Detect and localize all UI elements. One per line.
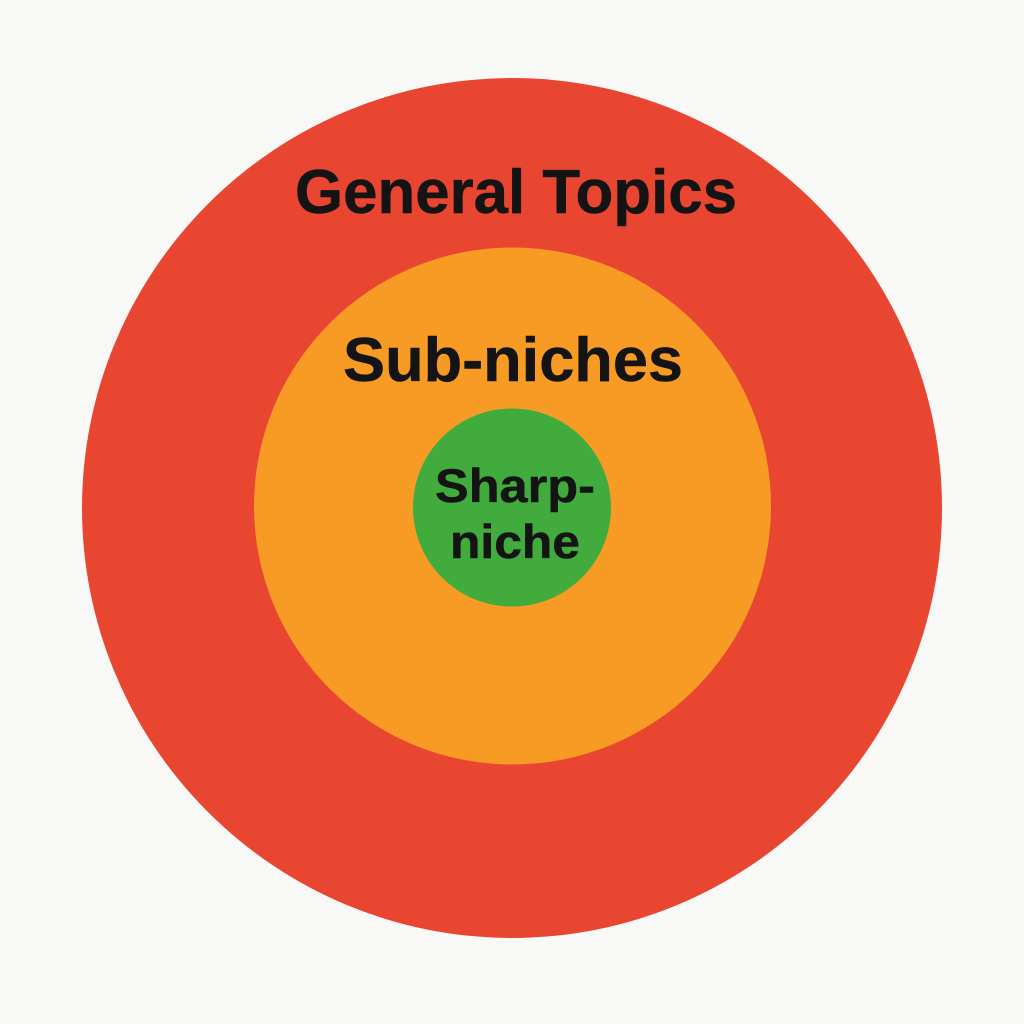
outer circle: General Topics [82, 78, 942, 938]
label: General Topics: General Topics [295, 158, 737, 227]
inner circle: Sharp-niche [413, 408, 611, 606]
label: Sharp-niche: niche [450, 515, 580, 568]
label: Sharp-niche: Sharp- [435, 459, 595, 512]
label: Sub-niches: Sub-niches [343, 326, 683, 395]
label: Sharp-niche [435, 459, 595, 568]
middle circle: Sub-niches [254, 248, 771, 764]
